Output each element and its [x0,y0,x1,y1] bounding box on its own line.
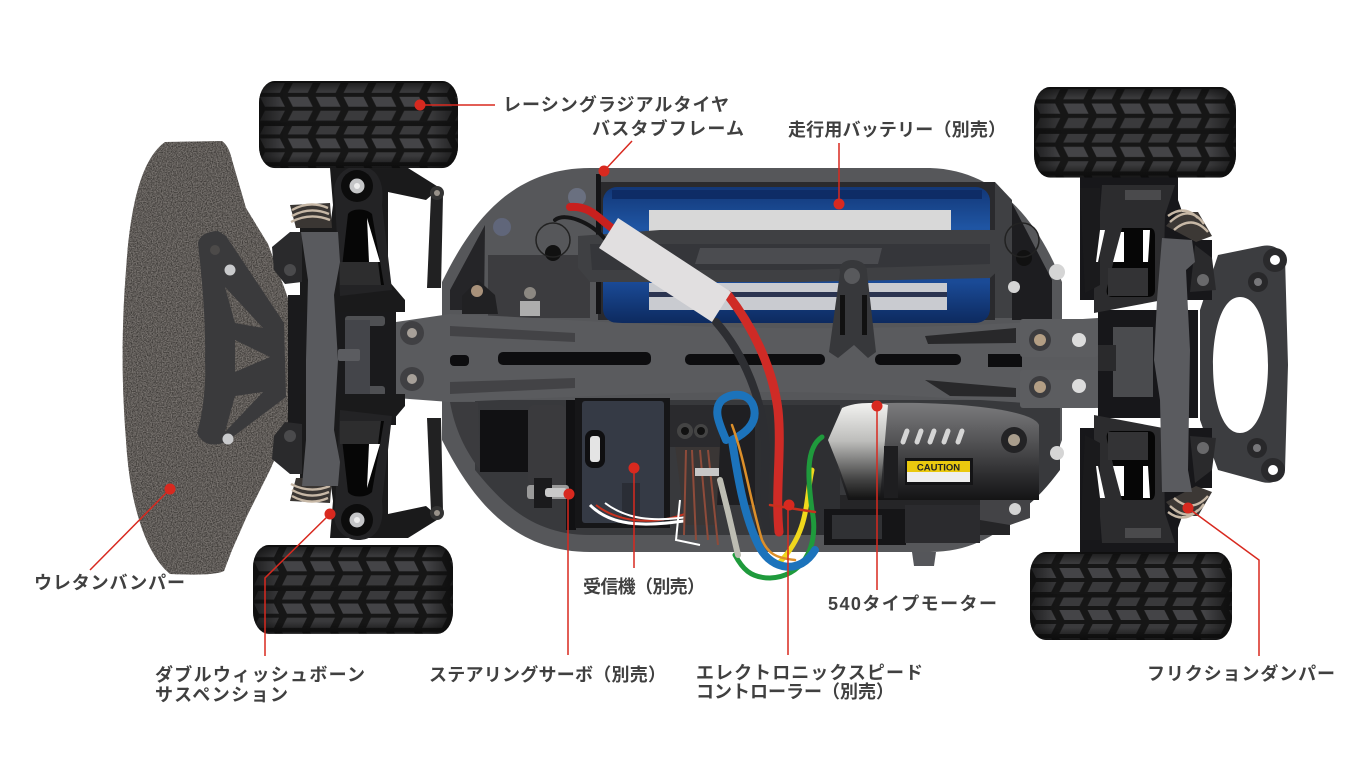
receiver [575,398,670,528]
front left tire bottom [253,545,453,634]
rear center block [1098,310,1198,418]
label: bathtub frame: バスタブフレーム [592,118,744,139]
rear suspension lower [1080,415,1216,552]
label: electronic speed controller: エレクトロニックスピード [696,663,923,683]
front left tire top [259,81,458,168]
battery connector hook [829,260,876,358]
rear right tire bottom [1030,552,1232,640]
label: electronic speed controller [696,663,923,702]
front suspension lower [272,394,444,540]
rear suspension upper [1080,176,1216,313]
label: electronic speed controller: コントローラー（別売） [696,682,894,702]
urethane bumper foam [123,141,290,575]
battery strap [578,230,1001,282]
label: double wishbone suspension [155,664,365,705]
central beam [396,314,1098,408]
vents [903,431,962,442]
rear plate posts [1247,248,1287,482]
servo horn [527,478,569,508]
battery [603,187,990,323]
label: 540 type motor: 540タイプモーター [828,594,997,614]
front suspension upper [272,166,444,312]
leader lines [90,105,1259,656]
servo plug block [670,405,720,447]
connector tag [599,218,731,322]
label: double wishbone suspension: ダブルウィッシュボーン [155,664,365,685]
label: friction damper: フリクションダンパー [1147,663,1335,684]
front suspension center [288,295,396,425]
leader dots [164,100,1194,520]
beam screws left [400,280,540,391]
caution sticker: CAUTION [917,462,960,474]
label: running battery: 走行用バッテリー（別売） [788,120,1006,140]
motor [828,403,1039,500]
receiver wires [590,445,720,545]
body clips [536,223,1039,266]
label: racing radial tire: レーシングラジアルタイヤ [503,94,729,115]
ESC [755,405,840,535]
label: double wishbone suspension: サスペンション [155,685,288,705]
tub frame [442,168,1062,552]
front gray knuckle arm [301,232,340,486]
tub interior floor [450,174,1060,535]
lower block [824,500,1030,566]
label: urethane bumper: ウレタンバンパー [34,573,185,593]
battery and motor wires [555,207,822,578]
bumper screws [210,245,236,444]
label: steering servo: ステアリングサーボ（別売） [429,664,666,685]
photo: RC car chassis [123,81,1288,640]
label: receiver: 受信機（別売） [583,576,705,597]
rear chassis plate [1200,246,1288,483]
rear right tire top [1034,87,1236,178]
caution sticker [905,458,973,485]
beam slots [450,326,1022,397]
front bumper plate [197,231,286,445]
rear beam mounts [1008,264,1098,460]
rear gray arm [1154,238,1195,492]
